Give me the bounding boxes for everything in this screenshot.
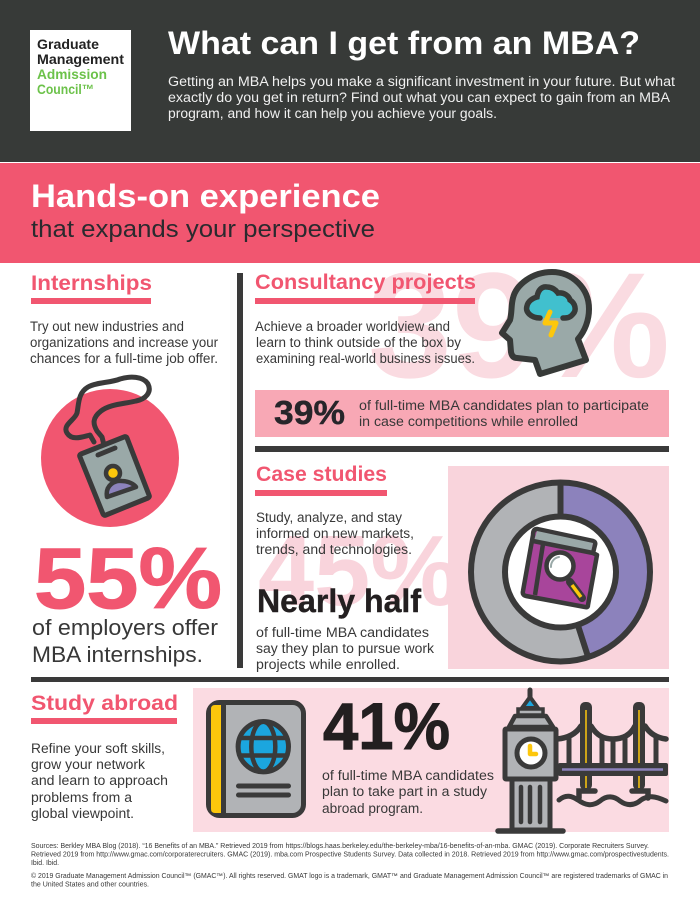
heading: case studies: Case studies bbox=[256, 463, 387, 486]
title: What can I get from an MBA? bbox=[168, 25, 640, 61]
intro paragraph bbox=[168, 74, 675, 121]
stat: nearly half: Nearly half bbox=[257, 583, 421, 619]
text: study abroad description: and learn to approach bbox=[31, 773, 168, 788]
panel: consultancy projects bbox=[255, 241, 670, 437]
footer: sources and copyright: Ibid. Ibid. bbox=[31, 860, 59, 867]
text: nearly half caption: projects while enrolled. bbox=[256, 657, 400, 672]
panel: case studies bbox=[255, 463, 669, 672]
icon: book with magnifying glass bbox=[523, 529, 597, 607]
text: case studies description: trends, and technologies. bbox=[256, 542, 412, 557]
icon: clock tower bbox=[498, 690, 563, 831]
text: study abroad description: Refine your soft skills, bbox=[31, 741, 165, 756]
logo: Graduate Management Admission Council bbox=[30, 30, 131, 131]
section banner: hands-on experience bbox=[0, 163, 700, 263]
logo: Graduate Management Admission Council: Admission bbox=[37, 67, 107, 82]
text: consultancy description: Achieve a broader worldview and bbox=[255, 319, 450, 334]
text: nearly half caption bbox=[256, 625, 434, 672]
heading: consultancy projects: Consultancy projects bbox=[255, 271, 476, 294]
text: 41 percent caption: plan to take part in a study bbox=[322, 784, 487, 799]
text: internships description: organizations and increase your bbox=[30, 335, 218, 350]
icon: ID badge with lanyard bbox=[41, 377, 179, 527]
text: 41 percent caption bbox=[322, 768, 494, 816]
stat: 55 percent: 55% bbox=[34, 531, 222, 627]
text: case studies description bbox=[256, 510, 414, 557]
heading: internships: Internships bbox=[31, 272, 152, 295]
section banner: hands-on experience: Hands-on experience bbox=[31, 178, 380, 214]
icon: passport bbox=[208, 702, 304, 816]
text: consultancy description: learn to think outside of the box by bbox=[256, 335, 461, 350]
footer: sources and copyright: the United States and other countries. bbox=[31, 882, 149, 888]
text: 55 percent caption: MBA internships. bbox=[32, 642, 203, 667]
background stat: 45 percent: 45% bbox=[258, 515, 460, 627]
text: study abroad description: problems from a bbox=[31, 790, 132, 805]
text: consultancy description: examining real-world business issues. bbox=[256, 351, 475, 366]
footer: sources and copyright: Sources: Berkley MBA Blog (2018). “16 Benefits of an MBA.” Retrieved 2019 from https://blogs.haas.berkeley.edu/the-berkeley-mba/16-benefits-of-an-mba. GMAC (2019). Corporate Recruiters Survey. bbox=[31, 843, 649, 850]
header band bbox=[0, 0, 700, 162]
text: internships description: Try out new industries and bbox=[30, 319, 184, 334]
text: 41 percent caption: of full-time MBA candidates bbox=[322, 768, 494, 783]
footer: sources and copyright bbox=[31, 843, 669, 888]
text: case studies description: informed on new markets, bbox=[256, 526, 414, 541]
text: 41 percent caption: abroad program. bbox=[322, 801, 423, 816]
footer: sources and copyright: © 2019 Graduate Management Admission Council™ (GMAC™). All rights reserved. GMAT logo is a trademark, GMAT™ and Graduate Management Admission Council™ are registered trademarks of GMAC in bbox=[31, 872, 668, 880]
background stat: 39 percent: 39% bbox=[368, 241, 670, 409]
text: study abroad description bbox=[31, 741, 168, 821]
logo: Graduate Management Admission Council: Graduate bbox=[37, 37, 99, 52]
callout: 39 percent case competitions bbox=[255, 390, 669, 437]
donut chart panel bbox=[448, 466, 669, 669]
text: nearly half caption: of full-time MBA candidates bbox=[256, 625, 429, 640]
intro paragraph: program, and how it can help you achieve your goals. bbox=[168, 106, 497, 121]
text: case studies description: Study, analyze, and stay bbox=[256, 510, 402, 525]
panel: internships bbox=[30, 272, 222, 667]
callout: 39 percent case competitions: in case competitions while enrolled bbox=[359, 414, 578, 429]
intro paragraph: exactly do you get in return? Find out what you can expect to gain from an MBA bbox=[168, 90, 670, 105]
text: 55 percent caption bbox=[32, 615, 218, 667]
stat: 41 percent: 41% bbox=[323, 689, 450, 763]
donut chart: 45 percent bbox=[470, 482, 651, 662]
icon: bridge bbox=[557, 702, 668, 805]
text: study abroad description: grow your network bbox=[31, 757, 145, 772]
callout: 39 percent case competitions: of full-time MBA candidates plan to participate bbox=[359, 398, 649, 413]
footer: sources and copyright: Retrieved 2019 from http://www.gmac.com/corporaterecruiters. GMAC (2019). mba.com Prospective Students Survey. Data collected in 2018. Retrieved 2019 from http://www.gmac.com/prospectivestudents. bbox=[31, 852, 669, 858]
heading: study abroad: Study abroad bbox=[31, 692, 178, 715]
text: nearly half caption: say they plan to pursue work bbox=[256, 641, 434, 656]
study abroad stat panel bbox=[193, 688, 669, 832]
text: consultancy description bbox=[255, 319, 475, 366]
icon: head with storm cloud bbox=[502, 272, 589, 374]
logo: Graduate Management Admission Council: Management bbox=[37, 52, 125, 67]
callout: 39 percent case competitions: 39% bbox=[274, 394, 345, 431]
intro paragraph: Getting an MBA helps you make a significant investment in your future. But what bbox=[168, 74, 675, 89]
panel: study abroad bbox=[31, 688, 669, 832]
text: study abroad description: global viewpoint. bbox=[31, 806, 134, 821]
text: internships description bbox=[30, 319, 218, 366]
text: 55 percent caption: of employers offer bbox=[32, 615, 218, 640]
text: internships description: chances for a full-time job offer. bbox=[30, 351, 218, 366]
section banner: hands-on experience: that expands your perspective bbox=[31, 216, 375, 243]
logo: Graduate Management Admission Council: Council™ bbox=[37, 82, 94, 97]
